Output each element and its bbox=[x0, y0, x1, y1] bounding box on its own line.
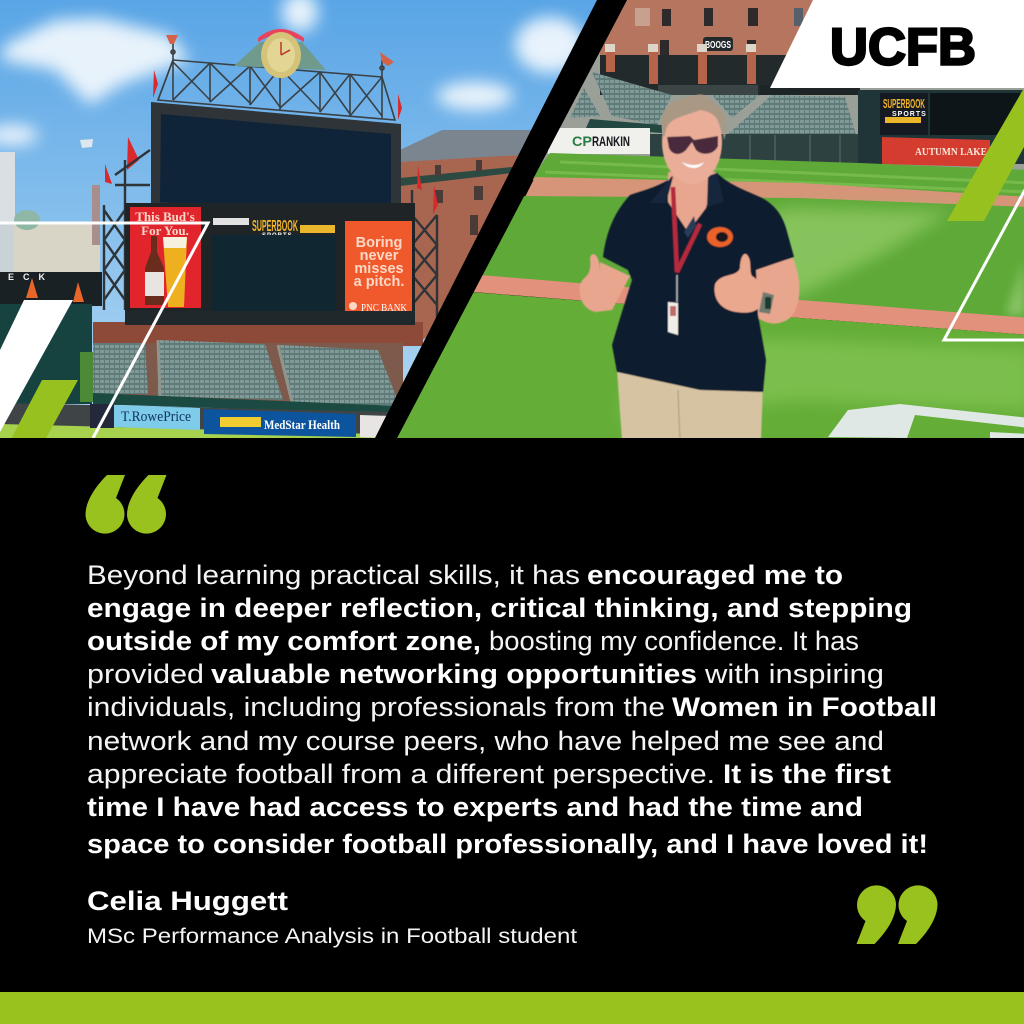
lattice towers bbox=[104, 150, 437, 330]
logo: UCFB: UCFB bbox=[830, 18, 976, 76]
right bullpen signs: SPORTS bbox=[892, 111, 927, 118]
lanyard bbox=[673, 187, 700, 272]
left green accent bbox=[0, 380, 78, 522]
lower board bbox=[125, 203, 415, 311]
red beer ad: This Bud's bbox=[135, 209, 195, 224]
icon: closing quotation marks bbox=[856, 885, 938, 944]
orange PNC ad: misses bbox=[354, 261, 404, 277]
quote text: appreciate football from a different perspective. bbox=[87, 759, 715, 789]
polo shirt bbox=[603, 173, 794, 392]
quote text: space to consider football professionally, and I have loved it! bbox=[87, 829, 928, 859]
photo: woman on baseball field bbox=[380, 0, 1024, 440]
collar bbox=[650, 173, 724, 207]
black quote panel bbox=[0, 438, 1024, 992]
orioles logo bbox=[707, 227, 733, 247]
lower board: SPORTS bbox=[262, 233, 293, 239]
right arm bbox=[754, 258, 799, 324]
id card bbox=[668, 302, 678, 335]
neck bbox=[668, 172, 716, 232]
quote text: Beyond learning practical skills, it has bbox=[87, 560, 580, 590]
right hand and thumb bbox=[714, 254, 763, 313]
left arm and thumb bbox=[580, 254, 630, 312]
field bbox=[395, 153, 1024, 438]
quote text: encouraged me to bbox=[587, 560, 843, 590]
right white outline accent bbox=[944, 188, 1024, 340]
scoreboard truss bbox=[158, 44, 395, 120]
orange PNC ad: PNC BANK bbox=[361, 303, 408, 314]
quote text: It is the first bbox=[723, 759, 891, 789]
red beer ad: For You. bbox=[141, 223, 189, 238]
logo: UCFB bbox=[770, 0, 1024, 88]
quote text: valuable networking opportunities bbox=[211, 659, 697, 689]
person bbox=[580, 95, 799, 440]
right green accent bbox=[947, 88, 1024, 221]
brick stadium facade: BOOGS bbox=[705, 40, 731, 51]
clouds bbox=[0, 0, 585, 145]
orange PNC ad: Boring bbox=[356, 235, 402, 251]
dugout wall bbox=[650, 134, 865, 165]
quote text: provided bbox=[87, 659, 204, 689]
photo: stadium scoreboard bbox=[0, 0, 620, 438]
orange PNC ad: a pitch. bbox=[354, 274, 404, 290]
icon: opening quotation marks bbox=[86, 475, 166, 534]
scoreboard ornaments bbox=[166, 35, 394, 66]
right bullpen signs: AUTUMN LAKE bbox=[915, 146, 987, 158]
quote text: network and my course peers, who have helped me see and bbox=[87, 726, 884, 756]
orange PNC ad bbox=[345, 221, 412, 320]
scoreboard clock bbox=[234, 29, 326, 78]
head bbox=[662, 100, 722, 184]
green footer bar bbox=[0, 992, 1024, 1024]
quote text: Women in Football bbox=[672, 692, 937, 722]
right bullpen signs: SUPERBOOK bbox=[883, 96, 925, 111]
attribution role: MSc Performance Analysis in Football student bbox=[87, 925, 577, 948]
outfield wall with sponsor boards: MedStar Health bbox=[264, 417, 341, 432]
quote text: time I have had access to experts and had the time and bbox=[87, 792, 863, 822]
distant buildings: ECK bbox=[8, 272, 54, 282]
flags bbox=[80, 70, 438, 214]
outfield wall with sponsor boards bbox=[0, 393, 400, 438]
main screen bbox=[151, 102, 401, 203]
outfield wall with sponsor boards: T.RowePrice bbox=[121, 409, 191, 425]
quote text: with inspiring bbox=[704, 659, 884, 689]
brick warehouse bbox=[400, 130, 540, 345]
quote text: outside of my comfort zone, bbox=[87, 626, 481, 656]
distant buildings bbox=[0, 152, 102, 404]
red beer ad bbox=[130, 207, 201, 308]
seating stands bbox=[93, 311, 423, 406]
quote text: individuals, including professionals from the bbox=[87, 692, 665, 722]
CP Rankin sign: CP bbox=[572, 133, 592, 149]
quote text: engage in deeper reflection, critical thinking, and stepping bbox=[87, 593, 912, 623]
CP Rankin sign bbox=[548, 128, 650, 154]
shorts bbox=[617, 370, 763, 440]
left white accent bbox=[0, 300, 73, 432]
lower board: SUPERBOOK bbox=[252, 218, 298, 235]
quote text bbox=[87, 560, 937, 859]
brick stadium facade bbox=[600, 0, 860, 95]
left white outline accent bbox=[0, 223, 208, 438]
diagonal black divider bbox=[375, 0, 627, 438]
quote text: boosting my confidence. It has bbox=[489, 626, 859, 656]
attribution name: Celia Huggett bbox=[87, 886, 288, 916]
stands bbox=[570, 72, 856, 135]
right bullpen signs bbox=[858, 90, 1024, 167]
orange PNC ad: never bbox=[360, 248, 399, 264]
watch bbox=[759, 292, 774, 314]
CP Rankin sign: RANKIN bbox=[592, 133, 630, 149]
